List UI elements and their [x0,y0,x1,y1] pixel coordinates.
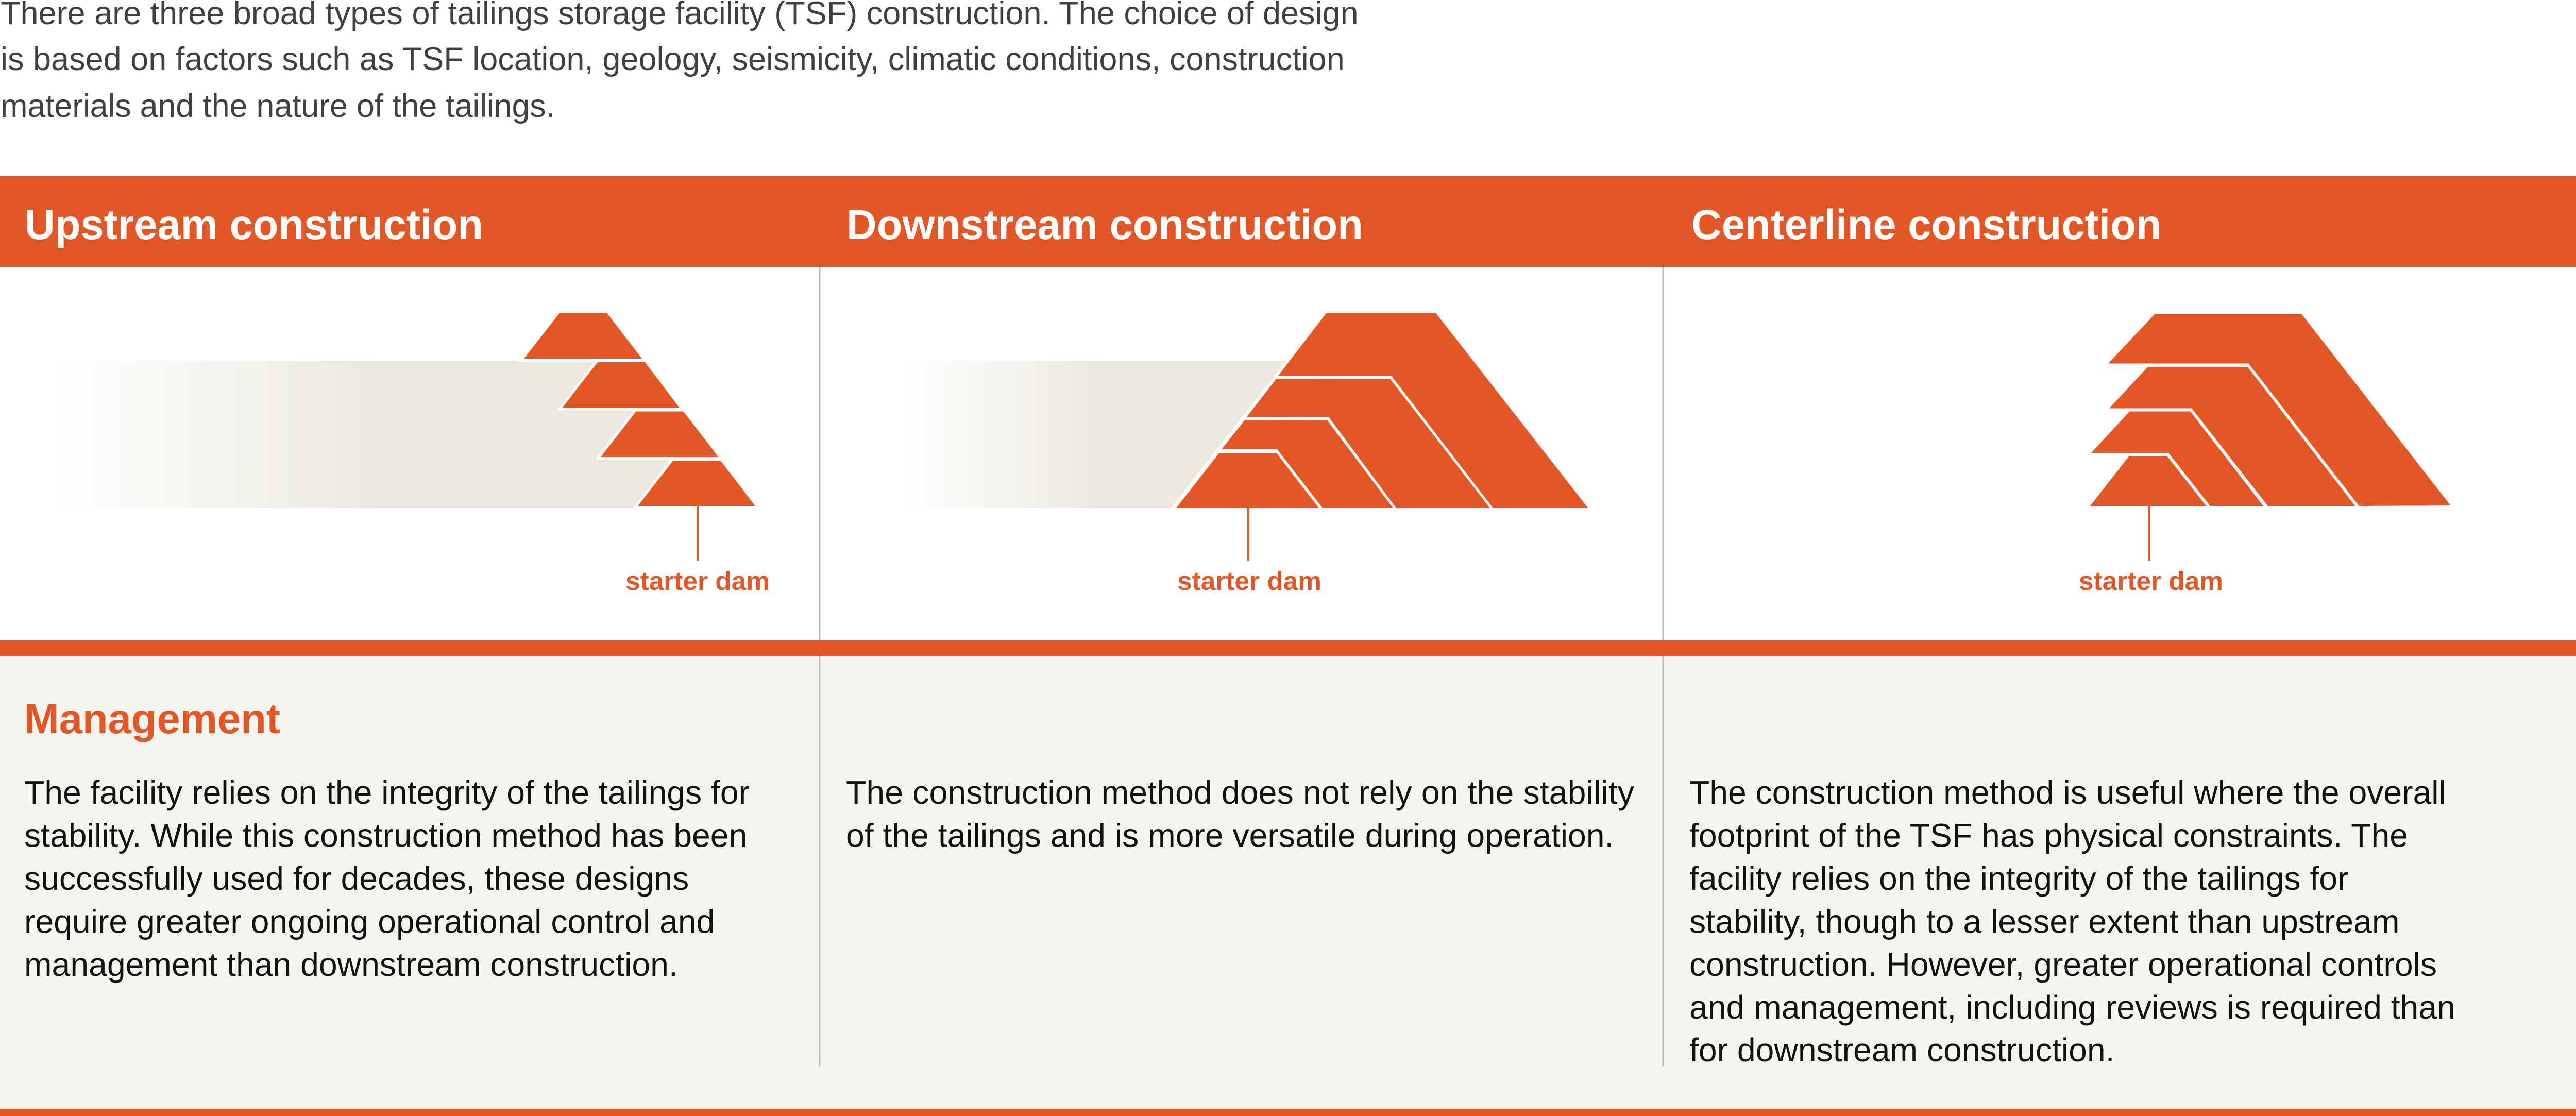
text: centerline management: footprint of the TSF has physical constraints. The [1689,817,2408,854]
bottom band [0,1109,2576,1116]
dam raise 2: upstream [562,362,680,408]
dam raise 1: downstream [1222,420,1393,508]
intro text [1,0,1359,124]
heading: downstream construction: Downstream construction [846,201,1363,248]
diagram: upstream construction [54,313,770,596]
text: downstream management: The construction method does not rely on the stability [846,774,1635,811]
panel: management background [0,656,2576,1109]
diagram: downstream construction [900,313,1588,596]
text: centerline management: construction. However, greater operational controls [1689,946,2437,983]
dam raise 3: downstream [1278,313,1588,508]
text: centerline management: for downstream construction. [1689,1032,2114,1069]
starter dam: downstream [1176,453,1319,508]
text: centerline management [1689,774,2455,1069]
dam raise 1: centerline [2091,411,2263,506]
starter dam: upstream [638,461,755,506]
label: starter dam: starter dam [1177,566,1321,596]
text: centerline management: The construction method is useful where the overall [1689,774,2446,811]
dam raise 2: downstream [1247,379,1490,508]
leader line: centerline [2148,506,2150,561]
dam raise 3: upstream [524,313,642,359]
text: downstream management [846,774,1635,854]
tailings: downstream [900,361,1286,508]
text: centerline management: stability, though to a lesser extent than upstream [1689,903,2399,940]
dam raise 1: upstream [601,411,718,457]
text: upstream management: successfully used for decades, these designs [24,860,689,897]
heading: upstream construction: Upstream construction [25,201,483,248]
leader line: downstream [1247,508,1249,561]
dam raise 3: centerline [2108,314,2450,506]
heading: management: Management [24,696,280,742]
dam raise 2: centerline [2109,367,2355,506]
text: centerline management: facility relies on the integrity of the tailings for [1689,860,2348,897]
text: upstream management: The facility relies on the integrity of the tailings for [24,774,750,811]
divider band [0,640,2576,656]
text: upstream management [24,774,750,983]
column divider: upstream and downstream [819,267,820,1066]
intro text: is based on factors such as TSF location, geology, seismicity, climatic conditions, construction [1,41,1345,77]
label: starter dam: starter dam [2079,566,2223,596]
leader line: upstream [697,506,699,561]
label: starter dam: starter dam [625,566,770,596]
starter dam: centerline [2090,456,2206,506]
column divider: downstream and centerline [1662,267,1664,1066]
text: upstream management: stability. While this construction method has been [24,817,747,854]
heading: centerline construction: Centerline construction [1691,201,2161,248]
intro text: materials and the nature of the tailings. [1,88,555,124]
text: upstream management: require greater ongoing operational control and [24,903,715,940]
text: centerline management: and management, including reviews is required than [1689,989,2455,1026]
text: upstream management: management than downstream construction. [24,946,678,983]
text: downstream management: of the tailings and is more versatile during operation. [846,817,1614,854]
tailings: upstream [54,361,670,508]
header band [0,176,2576,267]
diagram: centerline construction [2079,314,2450,596]
